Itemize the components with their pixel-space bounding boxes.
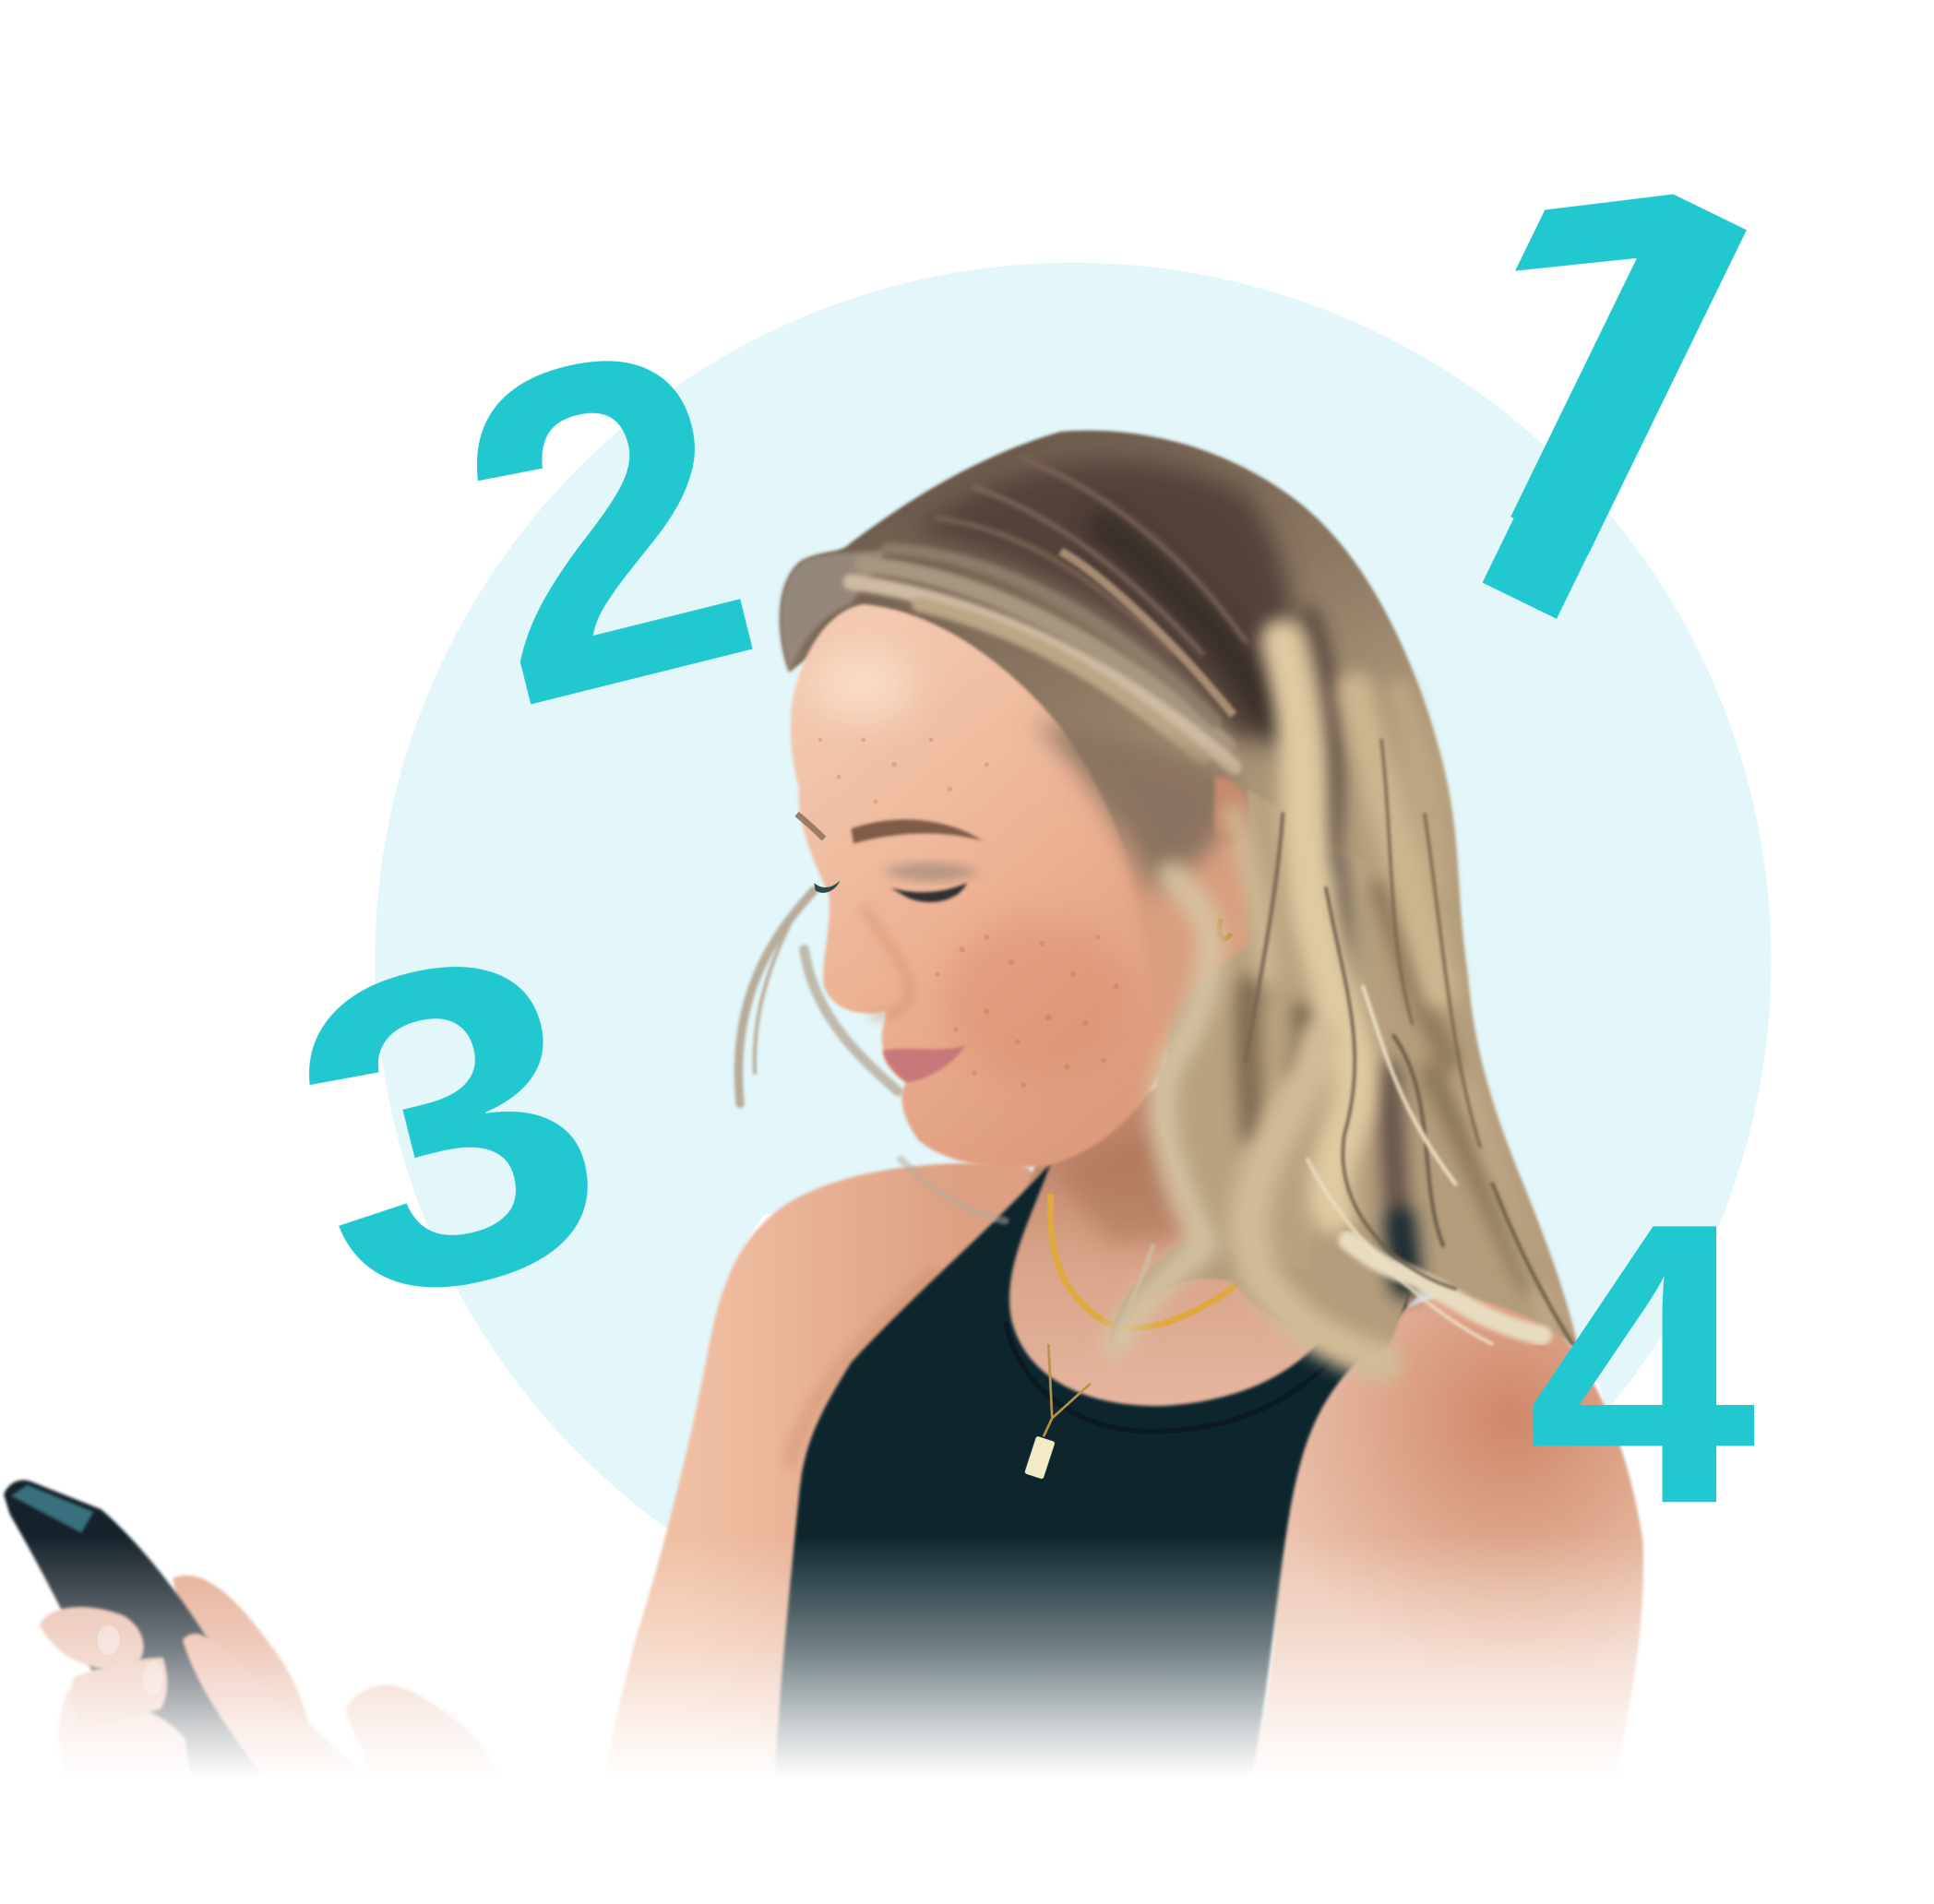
hair waves: dark undertone	[1248, 616, 1530, 1282]
hair strands: fine	[1110, 740, 1572, 1356]
hair base	[781, 431, 1579, 1356]
far eyebrow	[797, 814, 824, 839]
second finger	[71, 1658, 167, 1729]
thumb	[40, 1607, 144, 1670]
eyebrow	[851, 819, 983, 843]
illustration: woman looking at phone with floating numbers	[2, 194, 1772, 1770]
armhole shadow	[790, 1270, 937, 1468]
phone	[4, 1480, 308, 1779]
closed eye	[890, 883, 967, 902]
hair shading: dark band under braid	[1092, 518, 1283, 740]
person: woman	[4, 431, 1643, 1779]
background circle	[375, 263, 1772, 1659]
thumb nail	[98, 1625, 120, 1655]
loose hair wisps	[738, 890, 1005, 1220]
phone camera glass	[11, 1484, 94, 1533]
far eye	[814, 880, 840, 893]
number 2: 2	[414, 243, 794, 803]
nose shading	[864, 907, 911, 1017]
cheek blush	[948, 922, 1117, 1069]
left shoulder and arm	[604, 1163, 1048, 1779]
lips	[883, 1046, 966, 1083]
second hand	[345, 1684, 499, 1779]
top ribbing	[1005, 1322, 1347, 1432]
lower hand	[58, 1689, 191, 1779]
braid	[1061, 552, 1234, 715]
ear	[1215, 777, 1250, 845]
temple hair shadow	[1036, 721, 1235, 894]
hair shading: dark roots	[913, 461, 1297, 740]
skin between cheek and ear	[1116, 814, 1252, 1036]
blonde front band	[851, 458, 1246, 767]
forelock	[781, 549, 888, 672]
pointing finger	[183, 1634, 370, 1779]
hair waves: bright lower lock	[1348, 1241, 1542, 1336]
number 3: 3	[250, 850, 646, 1402]
gold necklace	[1051, 1194, 1248, 1328]
second finger nail	[143, 1661, 162, 1696]
finger behind phone	[173, 1576, 315, 1751]
forehead highlight	[814, 648, 913, 721]
face	[791, 604, 1170, 1168]
number 4: 4	[1527, 1140, 1759, 1588]
right shoulder and arm	[1252, 1292, 1643, 1779]
white backing under the fading body	[604, 1172, 1643, 1904]
neck and chest	[1008, 1087, 1418, 1408]
earring	[1219, 919, 1231, 938]
freckles	[818, 738, 1119, 1088]
hair waves: light locks	[1115, 641, 1554, 1363]
number 1: 1	[1289, 6, 1911, 791]
tank top	[774, 1163, 1413, 1779]
pendant necklace	[1024, 1344, 1091, 1480]
eye shadow	[882, 863, 981, 881]
shadow under chin	[1065, 1139, 1183, 1249]
side hair lock covering neck edge	[1156, 790, 1369, 1270]
